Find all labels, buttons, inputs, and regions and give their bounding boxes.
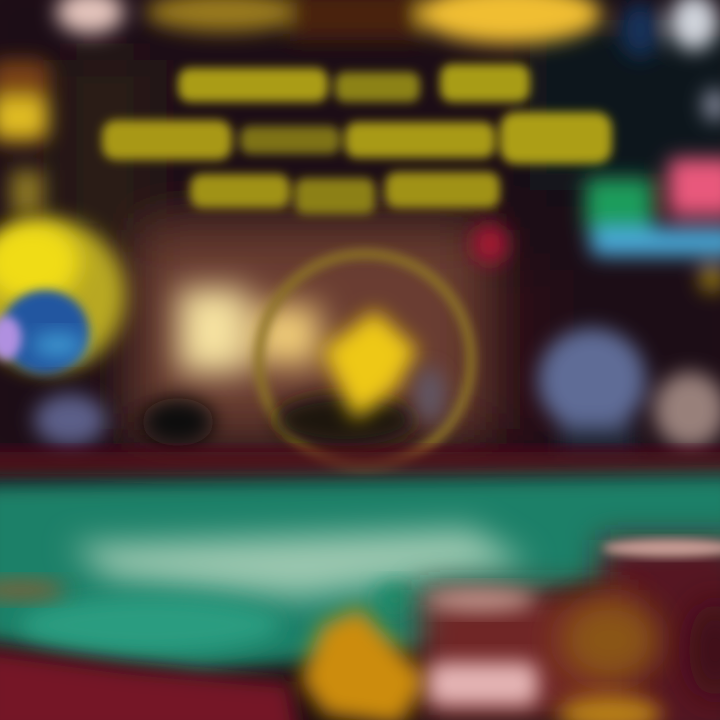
poker chips, bottom-right xyxy=(300,539,720,720)
left yellow ring and blue globe xyxy=(0,219,126,374)
gold ring with yellow emblem xyxy=(259,254,471,466)
green gaming table xyxy=(0,474,720,672)
top ceiling lights xyxy=(56,0,720,121)
bright window glow xyxy=(178,288,320,373)
headline: blurred yellow lines xyxy=(102,64,612,214)
background: dim casino hall xyxy=(45,20,720,456)
people silhouettes xyxy=(34,328,720,455)
red table edge xyxy=(0,452,720,474)
bottom-left crimson table rim xyxy=(0,648,300,720)
left wall sign and lamp xyxy=(0,60,50,215)
right neon sign panels xyxy=(472,158,720,292)
